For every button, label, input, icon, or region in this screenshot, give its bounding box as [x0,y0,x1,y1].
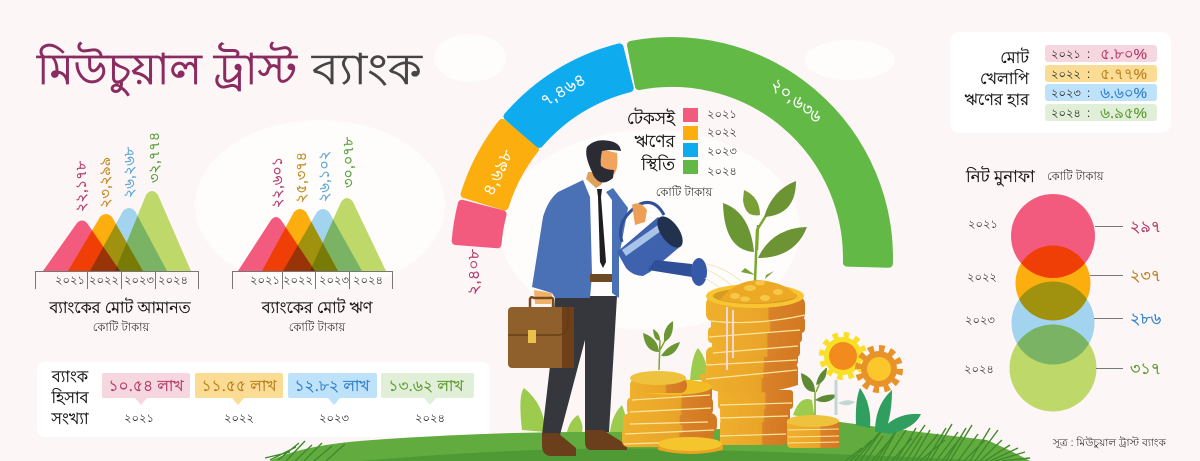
chart: total deposits: ২০২৩ [124,275,154,287]
gauge values [466,70,826,295]
illustration: grass hill [265,422,1030,461]
title [36,42,423,96]
chart: total loans: ব্যাংকের মোট ঋণ [261,298,373,317]
illustration: left coin stack [622,321,723,454]
chart: total loans: ২০২১ [250,275,280,287]
chart: net profit: ৩১৭ [1130,361,1161,378]
panel: default loan rate: ঋণের হার [965,92,1030,109]
chart: total loans: ২৬,১০২ [317,151,333,202]
source: সূত্র : মিউচুয়াল ট্রাস্ট ব্যাংক [1052,436,1166,449]
gauge segment 2024 [631,41,889,264]
tie [597,189,606,268]
chart: total loans: ২০২২ [283,275,313,287]
chart: total deposits: কোটি টাকায় [93,320,150,334]
legend: sustainable finance: ২০২২ [707,127,737,139]
chart: total deposits: ২২,১৭৮ [74,160,90,212]
gauge segment 2022 [465,123,535,206]
accounts 2022: ২০২২ [224,413,254,425]
chart: total loans: ২২,৬০১ [270,157,286,208]
legend: sustainable finance: স্থিতি [640,154,675,174]
chart: net profit: ২০২১ [968,219,998,231]
chart: net profit: নিট মুনাফা [965,166,1036,186]
illustration: businessman [508,140,628,456]
chart: total deposits: ২৩,২৯৯ [98,157,114,208]
panel: default loan rate: ২০২১ [1051,49,1081,61]
legend: sustainable finance: ২০২১ [707,109,737,121]
chart: total deposits: ২০২১ [55,275,85,287]
chart: net profit [964,166,1161,412]
accounts 2024: ১৩.৬২ লাখ [388,378,464,395]
illustration: large coin stack [700,280,805,445]
head [596,150,617,176]
panel: default loan rate: : [1087,49,1090,61]
accounts 2021: ১০.৫৪ লাখ [108,378,184,395]
legend: sustainable finance [627,108,737,199]
chart: net profit: ২০২৩ [965,315,995,327]
chart: total deposits: ব্যাংকের মোট আমানত [48,298,192,317]
legend: sustainable finance: টেকসই [627,108,676,128]
chart: net profit: ২৮৬ [1130,311,1161,328]
panel: default loan rate: ৫.৭৭% [1100,66,1147,83]
chart: net profit: কোটি টাকায় [1047,169,1105,183]
illustration: small right coin stack with sprout [787,368,840,448]
neck [586,172,602,188]
chart: net profit: ২৩৭ [1130,268,1161,285]
chart: total deposits: ২৬,২৬৮ [122,146,138,198]
panel: default loan rate: মোট [1000,48,1029,67]
accounts 2024 [381,373,474,425]
panel: default loan rate: ২০২২ [1051,69,1081,81]
panel: default loan rate: ৫.৮০% [1100,46,1147,63]
chart: total deposits: ২০২২ [89,275,119,287]
panel: default loan rate [950,32,1171,133]
accounts 2023: ১২.৮২ লাখ [294,378,370,395]
accounts 2021: ২০২১ [124,413,154,425]
legend: sustainable finance: ২০২৪ [707,166,737,178]
legend: sustainable finance: কোটি টাকায় [656,185,713,199]
hand on briefcase [534,290,552,304]
gauge values: ৪,৬৯৮ [479,147,517,199]
gauge segment 2023 [508,47,630,144]
chart: net profit: ২৯৭ [1130,219,1161,236]
shoes [542,433,576,456]
chart: total loans: ২০২৪ [353,275,383,287]
chart: total deposits: ২০২৪ [158,275,188,287]
chart: total loans: কোটি টাকায় [289,320,346,334]
panel: default loan rate: ৬.৬০% [1100,85,1147,102]
chart: total loans: ২৫,৩৭৪ [294,152,310,203]
chart: net profit: ২০২৪ [964,364,994,376]
briefcase [508,297,574,368]
trousers [542,296,617,435]
accounts label: হিসাব [50,388,90,407]
title: ব্যাংক [311,46,423,94]
front coin [658,444,723,454]
legend: sustainable finance: ঋণের [634,132,676,151]
belt [590,274,612,282]
accounts label: ব্যাংক [51,369,89,386]
gauge values: ২,৪০৮ [466,248,483,295]
accounts 2023 [288,373,377,425]
illustration: watering can [617,202,741,291]
accounts 2022: ১১.৫৫ লাখ [201,378,277,395]
gauge values: ২০,৬৩৬ [767,75,826,127]
illustration: sunflowers [824,337,921,434]
gauge segment 2021 [456,204,503,244]
illustration: small leaves behind coins [520,348,815,432]
accounts 2024: ২০২৪ [415,413,445,425]
chart: total deposits: ৩২,৭৭৪ [147,132,163,183]
illustration: large plant [723,181,807,282]
chart: net profit: ২০২২ [967,272,997,284]
gauge values: ৭,৪৬৪ [537,70,589,111]
title: মিউচুয়াল ট্রাস্ট [36,42,298,96]
small sprout [643,321,680,370]
accounts 2021 [102,373,190,425]
hair and beard [586,140,621,182]
chart: total deposits [36,132,198,334]
panel: bank accounts [37,362,490,437]
panel: default loan rate: : [1087,108,1090,120]
gauge chart: sustainable finance [456,41,889,295]
jacket [532,180,628,298]
chart: total loans: ২০২৩ [319,275,349,287]
accounts label: সংখ্যা [50,411,89,428]
panel: default loan rate: ২০২৪ [1051,108,1081,120]
accounts label [50,369,90,428]
panel: default loan rate: ৬.৯৫% [1100,105,1147,122]
panel: default loan rate: : [1087,69,1090,81]
accounts 2022 [195,373,283,425]
panel: default loan rate: ২০২৩ [1051,88,1081,100]
chart: total loans [232,136,392,334]
panel: default loan rate: : [1087,88,1090,100]
shirt [584,180,613,275]
legend: sustainable finance: ২০২৩ [707,146,737,158]
panel: default loan rate: খেলাপি [980,69,1030,88]
accounts 2023: ২০২৩ [319,413,349,425]
chart: total loans: ৩০,০৭৮ [341,136,357,188]
